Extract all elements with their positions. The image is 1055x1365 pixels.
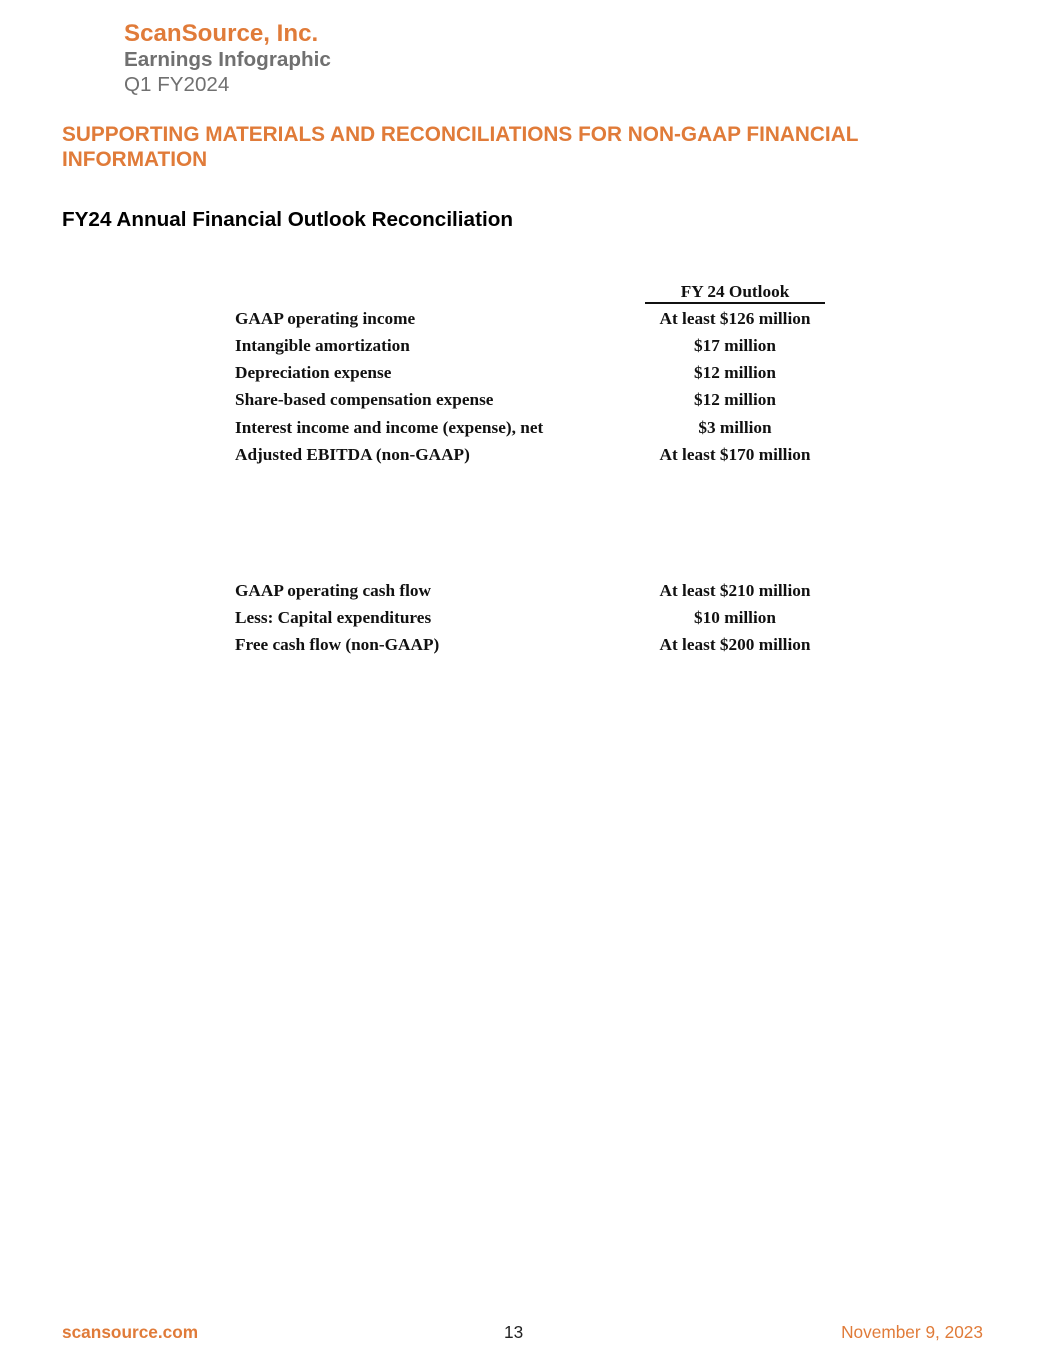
table: free cash flow reconciliation: $10 million — [694, 608, 776, 627]
report period: Q1 FY2024 — [124, 73, 229, 96]
footer: website: scansource.com — [62, 1322, 198, 1342]
table: free cash flow reconciliation: GAAP operating cash flow — [235, 581, 431, 600]
table: adjusted EBITDA reconciliation: Intangible amortization — [235, 336, 410, 355]
table: adjusted EBITDA reconciliation: $12 million — [694, 363, 776, 382]
table: adjusted EBITDA reconciliation: Share-based compensation expense — [235, 390, 493, 409]
footer: date: November 9, 2023 — [841, 1322, 983, 1342]
table: free cash flow reconciliation: Free cash flow (non-GAAP) — [235, 635, 439, 654]
table: adjusted EBITDA reconciliation: At least $170 million — [660, 445, 810, 464]
table: adjusted EBITDA reconciliation: At least $126 million — [660, 309, 810, 328]
sub heading: FY24 Annual Financial Outlook Reconciliation — [62, 208, 513, 231]
section heading: INFORMATION — [62, 148, 207, 171]
table: free cash flow reconciliation: At least $200 million — [660, 635, 810, 654]
company name: ScanSource, Inc. — [124, 20, 318, 47]
table: adjusted EBITDA reconciliation: Interest income and income (expense), net — [235, 418, 543, 437]
section heading — [62, 123, 858, 171]
table: adjusted EBITDA reconciliation: Depreciation expense — [235, 363, 391, 382]
column header: FY 24 Outlook — [681, 282, 789, 301]
table: adjusted EBITDA reconciliation: GAAP operating income — [235, 309, 415, 328]
report title: Earnings Infographic — [124, 48, 331, 71]
table: adjusted EBITDA reconciliation: $17 million — [694, 336, 776, 355]
table: adjusted EBITDA reconciliation — [235, 282, 825, 464]
header: company and report title — [124, 20, 331, 96]
table: adjusted EBITDA reconciliation: Adjusted EBITDA (non-GAAP) — [235, 445, 470, 464]
table: adjusted EBITDA reconciliation: $3 million — [698, 418, 772, 437]
column header rule — [645, 302, 825, 304]
table: free cash flow reconciliation: Less: Capital expenditures — [235, 608, 431, 627]
section heading: SUPPORTING MATERIALS AND RECONCILIATIONS FOR NON-GAAP FINANCIAL — [62, 123, 858, 146]
footer: page number: 13 — [504, 1322, 523, 1342]
table: adjusted EBITDA reconciliation: $12 million — [694, 390, 776, 409]
table: free cash flow reconciliation: At least $210 million — [660, 581, 810, 600]
table: free cash flow reconciliation — [235, 581, 810, 654]
